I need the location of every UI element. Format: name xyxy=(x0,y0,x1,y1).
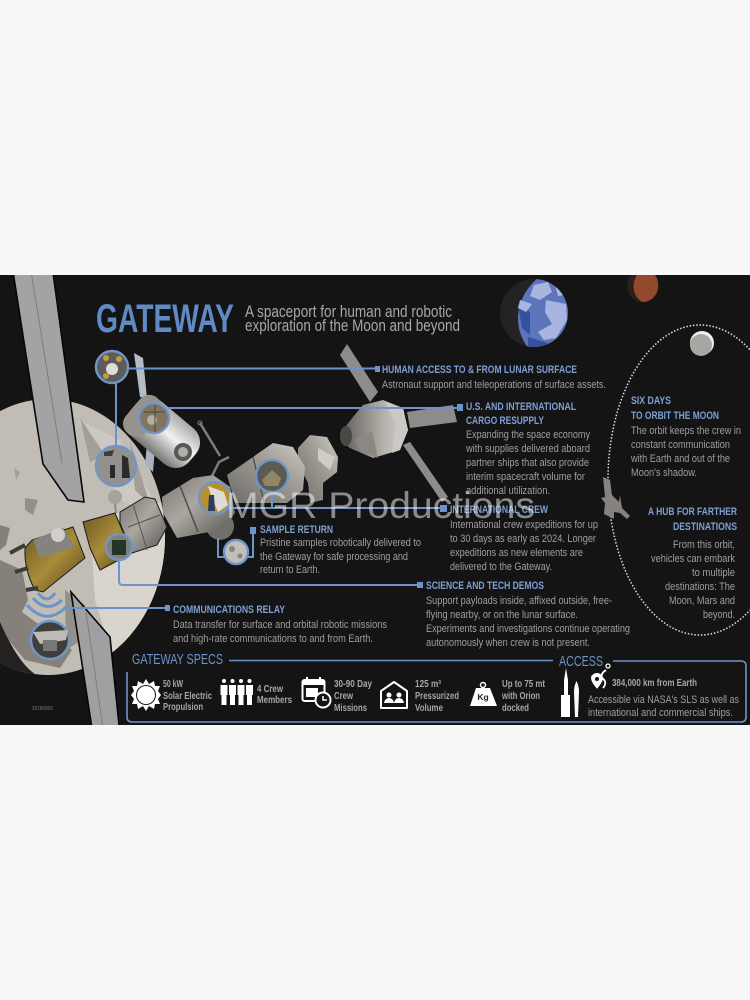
icon: rockets xyxy=(561,668,579,717)
spec: pressurized volume: Volume xyxy=(415,703,443,714)
ball tank xyxy=(206,512,234,540)
text block: cargo resupply: partner ships that also provide xyxy=(466,457,589,469)
orbit gap and small gateway icon xyxy=(600,477,630,519)
access text: 384,000 km from Earth xyxy=(612,678,697,689)
habitat module xyxy=(227,443,305,503)
cargo spacecraft xyxy=(118,353,207,475)
text block: international crew: INTERNATIONAL CREW xyxy=(450,504,548,516)
text block: communications relay: COMMUNICATIONS RELAY xyxy=(173,604,286,616)
text block: science and tech demos: Experiments and investigations continue operating xyxy=(426,623,630,635)
text block: cargo resupply: Expanding the space economy xyxy=(466,429,590,441)
icon: crew members xyxy=(220,679,253,705)
spec: crew missions xyxy=(334,679,372,714)
icon: mass weight: Kg xyxy=(477,692,489,702)
text block: hub for farther destinations: beyond. xyxy=(703,609,735,621)
callout circle: sample xyxy=(224,540,248,564)
text block: cargo resupply: interim spacecraft volume for xyxy=(466,471,585,483)
text block: hub for farther destinations: to multiple xyxy=(692,567,735,579)
subtitle: A spaceport for human and robotic xyxy=(245,302,452,321)
text block: six days: Moon's shadow. xyxy=(631,467,697,479)
callout circle: astronauts xyxy=(96,446,136,486)
callout circle: interior crew xyxy=(256,460,288,492)
text block: science and tech demos xyxy=(426,580,630,649)
infographic poster xyxy=(0,275,750,725)
spec: pressurized volume: 125 m³ xyxy=(415,679,442,690)
spec: crew members: Members xyxy=(257,695,292,706)
dish xyxy=(108,490,122,513)
spec: solar electric propulsion: Propulsion xyxy=(163,702,203,713)
airlock module xyxy=(298,435,338,503)
forward module xyxy=(162,475,235,538)
lunar surface xyxy=(0,399,170,680)
watermark: MGR Productions xyxy=(226,485,535,526)
spec: solar electric propulsion: 50 kW xyxy=(163,679,183,690)
Orion capsule xyxy=(340,400,408,458)
text block: hub for farther destinations: Moon, Mars and xyxy=(669,595,735,607)
connector lines xyxy=(66,368,458,608)
gold propulsion module xyxy=(10,513,132,592)
text block: sample return: Pristine samples robotically delivered to xyxy=(260,537,421,549)
text block: cargo resupply: U.S. AND INTERNATIONAL xyxy=(466,401,576,413)
text block: international crew: International crew expeditions for up xyxy=(450,519,598,531)
text block: six days: SIX DAYS xyxy=(631,395,671,407)
text block: human access: Astronaut support and teleoperations of surface assets. xyxy=(382,379,606,391)
icon: route to Moon xyxy=(592,664,610,688)
solar array upper xyxy=(12,265,84,502)
specs frame xyxy=(127,660,746,722)
date code: 20180905 xyxy=(32,706,53,712)
heading: gateway specs: GATEWAY SPECS xyxy=(132,651,223,668)
dark background panel xyxy=(0,275,750,725)
text block: hub for farther destinations: vehicles can embark xyxy=(651,553,735,565)
planet: Earth xyxy=(500,279,568,347)
planet: Mars xyxy=(627,275,659,302)
text block: international crew: to 30 days as early as 2024. Longer xyxy=(450,533,596,545)
text block: sample return: return to Earth. xyxy=(260,564,320,576)
text block: hub for farther destinations: destinations: The xyxy=(665,581,735,593)
text block: cargo resupply: CARGO RESUPPLY xyxy=(466,415,544,427)
spec: mass: docked xyxy=(502,703,529,714)
icon: sun xyxy=(131,679,161,711)
access text xyxy=(588,678,739,719)
callout circle: cargo hatch xyxy=(139,403,169,433)
text block: cargo resupply: with supplies delivered aboard xyxy=(465,443,590,455)
text block: sample return: SAMPLE RETURN xyxy=(260,524,333,536)
robotic arm xyxy=(198,421,229,476)
planet: Moon xyxy=(690,331,714,356)
text block: science and tech demos: autonomously when crew is not present. xyxy=(426,637,590,649)
text block: science and tech demos: flying nearby, or on the lunar surface. xyxy=(426,609,578,621)
text block: human access: HUMAN ACCESS TO & FROM LUNAR SURFACE xyxy=(382,364,577,376)
orbit path xyxy=(608,325,750,635)
text block: international crew: expeditions as new elements are xyxy=(450,547,583,559)
callout circle: lander xyxy=(96,351,128,383)
text block: international crew xyxy=(450,504,598,573)
title: GATEWAY xyxy=(96,297,234,341)
subtitle: exploration of the Moon and beyond xyxy=(245,316,460,335)
Orion solar arrays xyxy=(340,344,457,502)
text block: six days: constant communication xyxy=(631,439,730,451)
text block: cargo resupply xyxy=(465,401,590,497)
text block: hub for farther destinations: From this orbit, xyxy=(673,539,735,551)
text block: cargo resupply: additional utilization. xyxy=(466,485,550,497)
text block: science and tech demos: SCIENCE AND TECH DEMOS xyxy=(426,580,544,592)
callout circle: crew with samples xyxy=(199,482,231,514)
callout circle: rover xyxy=(31,621,69,659)
heading: access: ACCESS xyxy=(559,653,603,670)
spec: crew missions: Crew xyxy=(334,691,353,702)
spec: pressurized volume xyxy=(415,679,459,714)
spec: crew members xyxy=(257,684,292,706)
spec: crew members: 4 Crew xyxy=(257,684,283,695)
spec: mass: with Orion xyxy=(501,691,540,702)
text block: science and tech demos: Support payloads inside, affixed outside, free- xyxy=(426,595,612,607)
spec: solar electric propulsion: Solar Electric xyxy=(163,691,212,702)
text block: human access xyxy=(382,364,606,391)
spec: solar electric propulsion xyxy=(163,679,212,713)
solar array lower xyxy=(71,592,120,735)
text block: sample return xyxy=(260,524,421,576)
text block: hub for farther destinations xyxy=(648,506,737,621)
callout circle: cubesat xyxy=(106,534,132,560)
spec: crew missions: 30-90 Day xyxy=(334,679,372,690)
spec: mass: Up to 75 mt xyxy=(502,679,546,690)
text block: international crew: delivered to the Gateway. xyxy=(450,561,552,573)
connector end squares xyxy=(165,366,463,611)
icon: mass weight xyxy=(470,682,497,706)
spec: pressurized volume: Pressurized xyxy=(415,691,459,702)
subtitle xyxy=(245,302,460,335)
text block: six days: TO ORBIT THE MOON xyxy=(631,410,719,422)
text block: six days: with Earth and out of the xyxy=(630,453,730,465)
icon: calendar and clock xyxy=(302,677,330,708)
text block: communications relay: and high-rate communications to and from Earth. xyxy=(173,633,373,645)
text block: six days xyxy=(630,395,741,479)
spec: mass xyxy=(501,679,546,714)
spec: crew missions: Missions xyxy=(334,703,367,714)
icon: pressurized volume house xyxy=(381,682,407,708)
text block: communications relay xyxy=(173,604,387,645)
halo module xyxy=(120,497,167,553)
text block: sample return: the Gateway for safe processing and xyxy=(260,551,408,563)
communication waves xyxy=(27,593,67,616)
text block: communications relay: Data transfer for surface and orbital robotic missions xyxy=(173,619,387,631)
